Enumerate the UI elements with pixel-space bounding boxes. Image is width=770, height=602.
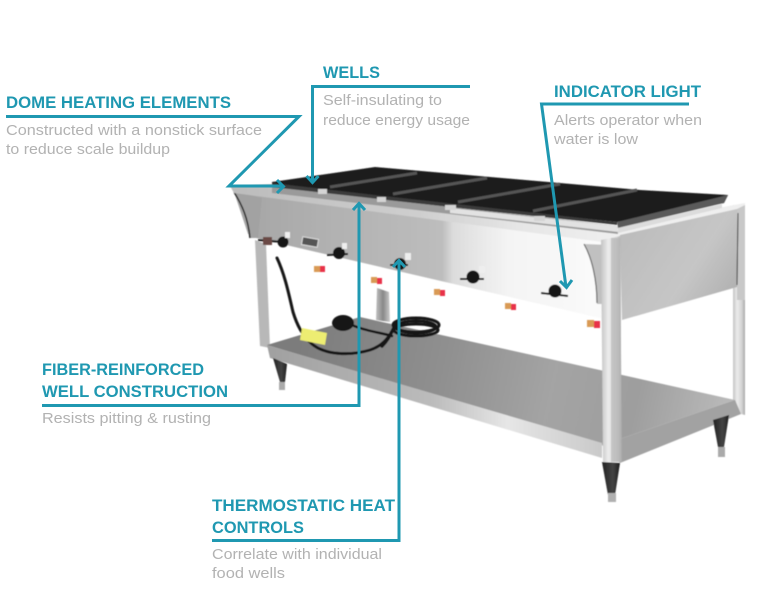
description: Self-insulating to — [323, 92, 442, 109]
well clips — [318, 189, 545, 221]
indicator lights — [314, 266, 600, 328]
callout: dome heating elements — [6, 93, 299, 193]
left gusset — [234, 192, 262, 238]
leader line — [6, 116, 299, 193]
leader line — [306, 86, 470, 182]
power cord and coil — [277, 258, 439, 354]
description: water is low — [553, 131, 638, 148]
badge — [301, 237, 319, 247]
callout: indicator light — [542, 82, 702, 288]
side panel — [620, 209, 737, 320]
top band — [230, 184, 745, 243]
leader line — [42, 204, 365, 406]
wells — [272, 167, 728, 228]
yellow tag — [300, 328, 327, 345]
description: Alerts operator when — [554, 112, 702, 129]
heading: INDICATOR LIGHT — [554, 82, 702, 101]
heading: CONTROLS — [212, 518, 304, 537]
temperature knobs — [258, 232, 568, 297]
undershelf — [267, 317, 741, 463]
left front leg — [255, 240, 270, 348]
heading: WELLS — [323, 63, 380, 82]
front panel — [234, 192, 612, 318]
description: reduce energy usage — [323, 112, 470, 129]
description: to reduce scale buildup — [6, 141, 170, 158]
heading: DOME HEATING ELEMENTS — [6, 93, 231, 112]
leader line — [212, 260, 405, 540]
callout: wells — [306, 63, 470, 182]
rear left post — [376, 288, 390, 322]
description: food wells — [212, 565, 285, 582]
leader line — [542, 104, 689, 288]
steam table product photo — [230, 167, 745, 502]
front right leg — [601, 236, 622, 462]
heading: WELL CONSTRUCTION — [42, 382, 228, 401]
feet — [273, 358, 729, 502]
right end post top — [737, 205, 745, 300]
heading: FIBER-REINFORCED — [42, 360, 204, 379]
callout: fiber-reinforced well construction — [42, 204, 365, 427]
description: Constructed with a nonstick surface — [6, 122, 262, 139]
right end gusset — [584, 244, 610, 304]
description: Correlate with individual — [212, 546, 382, 563]
description: Resists pitting & rusting — [42, 410, 211, 427]
well rim — [272, 187, 722, 234]
rear right leg — [733, 205, 745, 415]
callout: thermostatic heat controls — [212, 260, 405, 582]
heading: THERMOSTATIC HEAT — [212, 496, 396, 515]
plug — [332, 315, 354, 331]
